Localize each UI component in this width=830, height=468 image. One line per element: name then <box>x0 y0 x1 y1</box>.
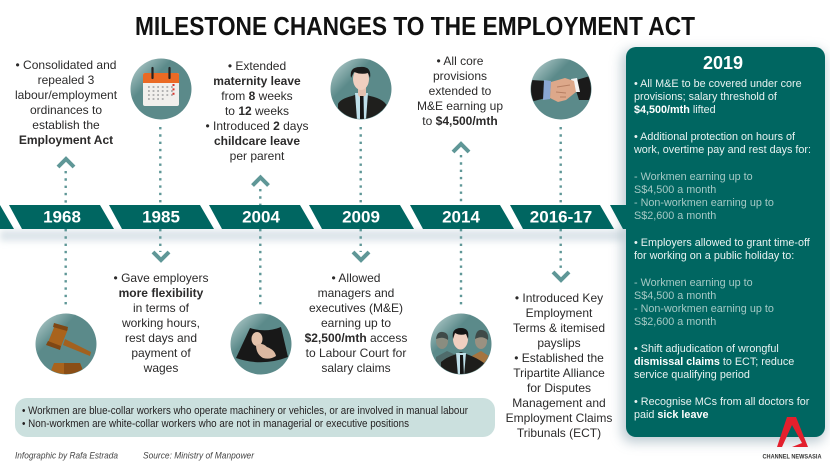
definitions note <box>15 398 495 437</box>
text: 2004: • Extended <box>228 59 286 73</box>
text: 2004: from 8 weeks <box>221 89 293 103</box>
text: 1968: labour/employment <box>15 88 118 102</box>
text: 2014: to $4,500/mth <box>422 114 498 128</box>
text: 2016-17: • Established the <box>514 351 604 365</box>
text: 2016-17: Employment <box>526 306 593 320</box>
panel: 2019 <box>610 47 825 437</box>
ribbon 1968: 1968 <box>43 208 81 226</box>
text: 2016-17: Management and <box>512 396 606 410</box>
arrows up and down <box>58 144 569 280</box>
text: 2016-17: Employment Claims <box>506 411 612 425</box>
ribbon 2014: 2014 <box>442 208 480 226</box>
panel body text: S$2,600 a month <box>634 210 716 222</box>
ribbon 1985 <box>109 205 214 229</box>
ribbon 2009 <box>309 205 414 229</box>
text: 1985: working hours, <box>121 316 200 330</box>
text: 1985: more flexibility <box>119 286 204 300</box>
ribbon 1985: 1985 <box>142 208 180 226</box>
text: 2009: managers and <box>318 286 394 300</box>
credit: Infographic by Rafa Estrada <box>15 450 118 462</box>
definitions note: • Workmen are blue-collar workers who operate machinery or vehicles, or are involved in manual labour <box>22 405 468 417</box>
icon: group of workers <box>430 314 492 380</box>
icon: gavel <box>36 314 96 378</box>
text: 2014: extended to <box>429 84 492 98</box>
panel body text: paid sick leave <box>634 409 708 421</box>
text: 1968: • Consolidated and <box>16 58 116 72</box>
panel body text: S$2,600 a month <box>634 316 716 328</box>
text: 2016-17: for Disputes <box>527 381 591 395</box>
panel heading: 2019 <box>703 53 743 73</box>
icon: handshake <box>530 58 592 120</box>
ribbon 2009: 2009 <box>342 208 380 226</box>
panel body text: • Recognise MCs from all doctors for <box>634 396 810 408</box>
icon: businessman <box>330 58 392 120</box>
ribbon 2004: 2004 <box>242 208 280 226</box>
icon: ultrasound <box>230 314 292 374</box>
ribbon 2016-17: 2016-17 <box>530 208 592 226</box>
text: 2009: earning up to <box>321 316 391 330</box>
text: 2016-17: Tribunals (ECT) <box>517 426 601 440</box>
text: 2009: $2,500/mth access <box>305 331 407 345</box>
panel body text: S$4,500 a month <box>634 184 716 196</box>
panel body text: • All M&E to be covered under core <box>634 78 802 90</box>
panel body text: provisions; salary threshold of <box>634 91 778 103</box>
text: 1985: wages <box>143 361 178 375</box>
text: 2014: • All core <box>437 54 484 68</box>
text: 2004: to 12 weeks <box>225 104 289 118</box>
definitions note: • Non-workmen are white-collar workers who are not in managerial or executive positions <box>22 418 409 430</box>
text: 1985: in terms of <box>133 301 190 315</box>
panel body text: for working on a public holiday to: <box>634 250 794 262</box>
panel body text: - Non-workmen earning up to <box>634 197 774 209</box>
source: Source: Ministry of Manpower <box>143 450 255 462</box>
panel body text: • Shift adjudication of wrongful <box>634 343 779 355</box>
text: 2004: per parent <box>230 149 285 163</box>
text: 2004: • Introduced 2 days <box>206 119 308 133</box>
logo: Channel NewsAsia: CHANNEL NEWSASIA <box>762 454 822 460</box>
dotted connectors <box>66 127 561 306</box>
text: 2009: executives (M&E) <box>309 301 403 315</box>
panel body text: - Non-workmen earning up to <box>634 303 774 315</box>
panel body text: - Workmen earning up to <box>634 171 753 183</box>
text: 2004: maternity leave <box>213 74 301 88</box>
icon: calendar <box>130 58 192 120</box>
text: 1968: Employment Act <box>19 133 113 147</box>
panel body text: S$4,500 a month <box>634 290 716 302</box>
text: 1968: ordinances to <box>30 103 102 117</box>
title: MILESTONE CHANGES TO THE EMPLOYMENT ACT <box>135 11 695 41</box>
text: 2014: M&E earning up <box>417 99 503 113</box>
timeline ribbons <box>0 205 614 229</box>
ribbon 2004 <box>209 205 314 229</box>
text: 2014: provisions <box>433 69 487 83</box>
text: 2016-17: Tripartite Alliance <box>513 366 605 380</box>
panel body text: • Additional protection on hours of <box>634 131 796 143</box>
panel body text <box>633 78 811 421</box>
text: 1968: repealed 3 <box>38 73 95 87</box>
panel body text: • Employers allowed to grant time-off <box>634 237 811 249</box>
panel body text: work, overtime pay and rest days for: <box>633 144 811 156</box>
ribbon 1968 <box>9 205 114 229</box>
text: 2016-17: payslips <box>537 336 581 350</box>
panel body text: $4,500/mth lifted <box>634 104 716 116</box>
panel body text: service qualifying period <box>634 369 750 381</box>
panel body text: dismissal claims to ECT; reduce <box>634 356 794 368</box>
text: 2016-17: Terms & itemised <box>513 321 605 335</box>
text: 2009: • Allowed <box>332 271 380 285</box>
text: 2004: childcare leave <box>214 134 300 148</box>
panel body text: - Workmen earning up to <box>634 277 753 289</box>
text: 1985: rest days and <box>125 331 197 345</box>
text: 2009: salary claims <box>321 361 391 375</box>
text: 2009: to Labour Court for <box>306 346 406 360</box>
text: 1968: establish the <box>32 118 100 132</box>
text: 1985: • Gave employers <box>114 271 208 285</box>
logo: Channel NewsAsia <box>762 417 822 460</box>
text: 2016-17: • Introduced Key <box>515 291 603 305</box>
ribbon 2014 <box>410 205 514 229</box>
text: 1985: payment of <box>131 346 191 360</box>
ribbon 2016-17 <box>510 205 614 229</box>
